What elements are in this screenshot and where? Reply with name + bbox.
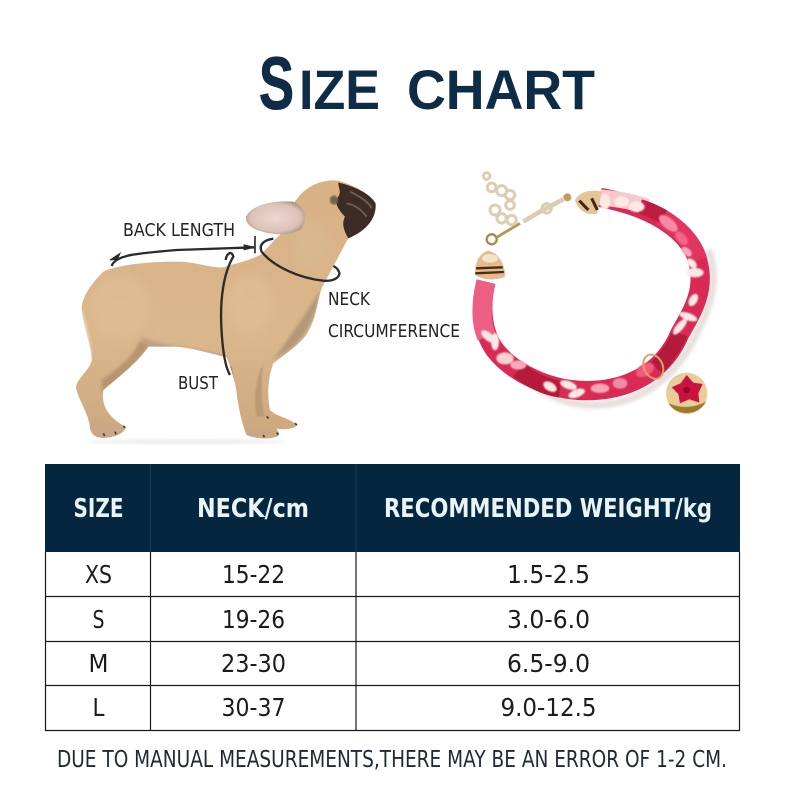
header: size: SIZE	[74, 494, 124, 524]
bell charm	[640, 351, 707, 414]
bust measure loop	[221, 253, 233, 375]
dog ear	[246, 201, 305, 234]
size table	[45, 464, 740, 730]
row M: M	[88, 649, 108, 678]
dog muzzle	[330, 183, 376, 238]
row L: 30-37	[222, 693, 286, 722]
row L: 9.0-12.5	[500, 693, 596, 722]
table grid	[45, 552, 740, 730]
extension chain	[483, 173, 563, 237]
collar band	[482, 197, 700, 391]
row S	[92, 605, 590, 634]
row XS: XS	[85, 560, 112, 589]
title: S	[259, 42, 294, 125]
header: recommended weight: RECOMMENDED WEIGHT/kg	[384, 494, 712, 524]
collar flowers	[479, 194, 704, 400]
dog body	[76, 180, 375, 444]
row S: S	[92, 605, 104, 634]
label: neck: NECK	[328, 290, 370, 310]
row XS	[85, 560, 590, 589]
back length arrow	[110, 236, 255, 266]
row M: 6.5-9.0	[507, 649, 590, 678]
table header	[45, 464, 740, 552]
row XS: 15-22	[222, 560, 285, 589]
illustration: dog with measurement guides	[76, 180, 376, 444]
collar end cap left	[475, 234, 505, 279]
title: CHART	[407, 58, 595, 121]
illustration: floral collar with bell	[475, 173, 713, 414]
label: bust: BUST	[178, 374, 218, 394]
title	[259, 42, 595, 125]
neck measure loop	[261, 239, 339, 281]
row M: 23-30	[221, 649, 286, 678]
label: circumference: CIRCUMFERENCE	[328, 322, 460, 342]
row M	[88, 649, 590, 678]
row L: L	[92, 693, 105, 722]
collar shadow	[510, 250, 713, 405]
row XS: 1.5-2.5	[507, 560, 590, 589]
title: IZE	[299, 58, 380, 121]
header: neck: NECK/cm	[197, 494, 309, 524]
row L	[92, 693, 596, 722]
row S: 19-26	[222, 605, 285, 634]
collar end cap right	[563, 191, 602, 214]
row S: 3.0-6.0	[507, 605, 590, 634]
label: back length: BACK LENGTH	[123, 221, 235, 241]
